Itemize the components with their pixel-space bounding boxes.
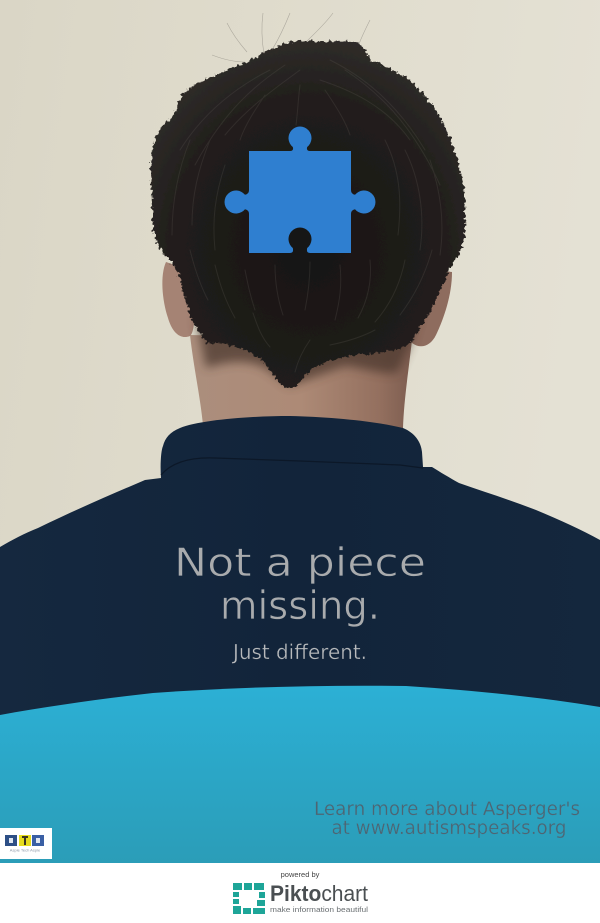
Piktochart tagline: make information beautiful (270, 905, 368, 914)
Piktochart logo mark (233, 883, 265, 914)
hair strands (172, 60, 442, 372)
powered by label: powered by (281, 870, 320, 879)
navy shirt body (0, 416, 600, 720)
puzzle piece icon (225, 127, 375, 253)
call to action line one: Learn more about Asperger's (314, 798, 580, 820)
small logo badge (0, 828, 52, 859)
right ear (411, 270, 452, 346)
Piktochart wordmark: Piktochart (270, 881, 368, 906)
small logo badge: Aspie Tech Aspie (10, 848, 41, 852)
call to action line two: at www.autismspeaks.org (332, 817, 566, 839)
hair (151, 13, 465, 388)
headline: Not a piece (174, 541, 426, 586)
collar fold line (161, 458, 423, 475)
subheading: Just different. (231, 640, 367, 664)
nape hair fade (196, 310, 420, 386)
flyaway hairs (212, 13, 370, 62)
left ear (162, 262, 194, 337)
teal shirt stripe (0, 686, 600, 863)
headline second line: missing. (220, 584, 380, 629)
neck (190, 335, 412, 428)
